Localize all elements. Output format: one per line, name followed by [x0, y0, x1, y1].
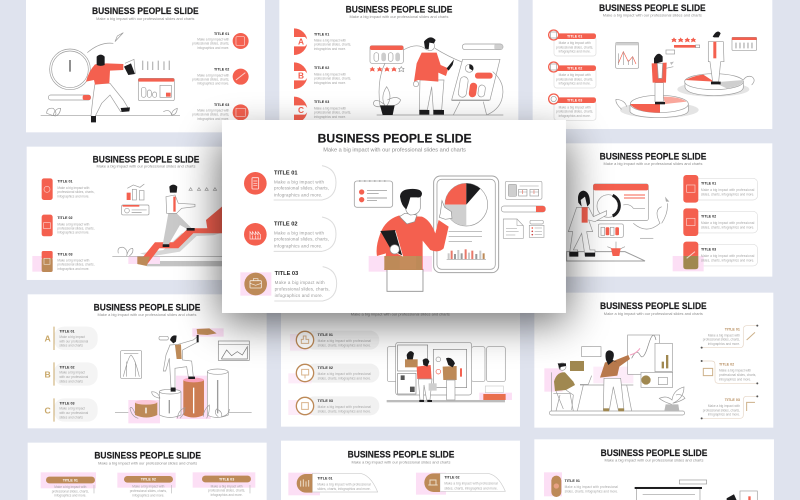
list: three titled items: Make a big impact with: [197, 109, 230, 113]
heading: BUSINESS PEOPLE SLIDE: [601, 448, 707, 458]
sweater: [377, 216, 449, 270]
list: three icon cards: TITLE 03: [701, 248, 716, 252]
list: three titled items with icons: Make a big impact with: [57, 222, 90, 226]
list: three header cards: infographics and more.: [559, 82, 591, 86]
list: A B C pills: with our professional: [59, 339, 89, 343]
list: A B C items: infographics and more.: [314, 115, 346, 119]
list: three icon cards: Make a big impact with professional: [701, 221, 755, 225]
illustration: man with flag on rising cylinders: [115, 328, 252, 423]
list: three connector items: infographics and more.: [719, 377, 751, 381]
list: A B C items: infographics and more.: [314, 81, 346, 85]
list: three titled items: professional slides, charts,: [192, 77, 229, 81]
subheading: Make a big impact with our professional slides and charts: [96, 17, 195, 21]
list: three titled items with icons: infographics and more.: [57, 267, 90, 271]
trousers: [387, 269, 423, 291]
list: three tan header columns: TITLE 01: [63, 478, 78, 482]
chart: small bars: [447, 249, 486, 259]
list: three header cards: TITLE 03: [567, 99, 582, 103]
item: title 01: [244, 166, 336, 200]
progress slider: [501, 206, 546, 212]
list: three connector items: Make a big impact with: [719, 369, 751, 373]
list: three tan header columns: professional slides, charts,: [52, 489, 89, 493]
illustration: woman presenting dashboard: [567, 184, 669, 261]
illustration: man pointing at chart: [369, 189, 452, 291]
list: three ringed pills: TITLE 02: [318, 366, 333, 370]
heading: BUSINESS PEOPLE SLIDE: [318, 132, 472, 146]
list: three titled items: infographics and more.: [197, 82, 229, 86]
list: A B C items: Make a big impact with: [314, 106, 346, 110]
chart: pie: [445, 183, 488, 226]
list: A B C items: [294, 28, 351, 123]
list: three titled items with icons: professional slides, charts,: [57, 190, 95, 194]
list: three connector items: infographics and more.: [708, 413, 740, 417]
list: A B C pills: Make a big impact: [59, 371, 85, 375]
list: three icon cards: slides, charts, infographics and more.: [701, 192, 754, 196]
list: three connector items: TITLE 02: [719, 363, 734, 367]
list: three icon cards: Make a big impact with professional: [701, 188, 755, 192]
list: two tan half circle items: Make a big impact with professional: [444, 482, 498, 486]
icon: checklist: [529, 220, 544, 237]
list: three tan header columns: [41, 472, 255, 498]
list: A B C pills: A: [45, 334, 52, 344]
panel: center slide: [222, 120, 566, 313]
list: three connector items: [701, 325, 758, 419]
panel: slide row three left: [28, 294, 267, 428]
list: three header cards: TITLE 02: [567, 66, 582, 70]
list: three header cards: professional slides, charts,: [556, 110, 593, 114]
folder: [380, 230, 403, 256]
list: three connector items: infographics and more.: [708, 342, 740, 346]
item: title 02: [244, 217, 336, 251]
list: three header cards: [549, 30, 596, 120]
list: three header cards: Make a big impact with: [559, 41, 591, 45]
subheading: Make a big impact with our professional slides and charts: [97, 313, 197, 317]
list: three connector items: TITLE 03: [725, 398, 740, 402]
list: three titled items: professional slides, charts,: [192, 113, 229, 117]
list: three ringed pills: slides, charts, infographics and more.: [318, 343, 371, 347]
item: title 01: Make a big impact with: [274, 179, 324, 184]
list: three header cards: TITLE 01: [567, 34, 582, 38]
subheading: Make a big impact with our professional slides and charts: [603, 14, 702, 18]
list: three titled items: TITLE 02: [214, 68, 229, 72]
icon: document: [503, 219, 523, 238]
heading: BUSINESS PEOPLE SLIDE: [600, 301, 707, 311]
list: three icon cards: TITLE 01: [701, 182, 716, 186]
icon: briefcase: [244, 273, 267, 295]
list: A B C items: professional slides, charts,: [314, 111, 351, 115]
list: three tan header columns: TITLE 03: [219, 477, 234, 481]
list: A B C items: TITLE 02: [314, 66, 329, 70]
list: three icon cards: [673, 175, 758, 271]
list: three titled items with icons: Make a big impact with: [57, 259, 90, 263]
list: three ringed pills: slides, charts, infographics and more.: [318, 376, 371, 380]
panel: slide row four left: [28, 443, 267, 500]
panel: slide row three center: [281, 305, 520, 427]
list: A B C pills: TITLE 03: [59, 401, 75, 405]
subheading: Make a big impact with our professional slides and charts: [604, 312, 703, 316]
list: three tan header columns: infographics and more.: [211, 493, 243, 497]
panel: slide top center: [279, 0, 518, 123]
subheading: Make a big impact with our professional slides and charts: [323, 147, 466, 153]
illustration: two women on pie charts: [616, 31, 757, 118]
list: A B C pills: TITLE 01: [59, 330, 75, 334]
list: two tan half circle items: TITLE 02: [444, 476, 460, 480]
list: three titled items: Make a big impact with: [197, 73, 230, 77]
list: A B C pills: C: [45, 405, 52, 415]
list: three titled items: infographics and more.: [197, 46, 229, 50]
list: three titled items: TITLE 01: [214, 32, 229, 36]
list: A B C items: A: [298, 37, 304, 47]
illustration: calendar card: [354, 181, 393, 207]
list: A B C pills: slides and charts: [59, 344, 83, 348]
list: three titled items: TITLE 03: [214, 103, 229, 107]
list: three ringed pills: slides, charts, infographics and more.: [318, 409, 371, 413]
list: A B C pills: B: [45, 369, 51, 379]
list: A B C items: Make a big impact with: [314, 38, 346, 42]
list: A B C items: TITLE 01: [314, 32, 329, 36]
list: three connector items: professional slides, charts,: [703, 408, 740, 412]
list: A B C pills: Make a big impact: [59, 335, 85, 339]
list: A B C items: Make a big impact with: [314, 72, 346, 76]
list: three ringed pills: Make a big impact with professional: [318, 372, 371, 376]
item: title 03: [240, 267, 337, 301]
item: title 03: Make a big impact with: [275, 280, 325, 285]
list: three header cards: Make a big impact with: [559, 105, 591, 109]
list: three titled items: Make a big impact with: [197, 38, 230, 42]
panel: slide top left: [26, 0, 265, 132]
list: three tan header columns: professional slides, charts,: [130, 489, 167, 493]
card: document summary: [505, 181, 542, 199]
list: three tan header columns: Make a big impact with: [54, 485, 87, 489]
list: A B C items: infographics and more.: [314, 47, 346, 51]
list: three titled items with icons: TITLE 01: [57, 180, 73, 184]
subheading: Make a big impact with our professional slides and charts: [351, 312, 450, 316]
subheading: Make a big impact with our professional slides and charts: [349, 15, 449, 19]
list: three header cards: professional slides, charts,: [556, 77, 593, 81]
list: A B C pills: slides and charts: [59, 379, 83, 383]
list: three ringed pills: Make a big impact with professional: [318, 405, 371, 409]
item: title 03: professional slides, charts,: [275, 286, 330, 291]
subheading: Make a big impact with our professional slides and charts: [98, 461, 197, 465]
list: three tan header columns: infographics and more.: [132, 493, 164, 497]
list: A B C pills: slides and charts: [59, 415, 83, 419]
item: title 01: TITLE 01: [274, 170, 298, 176]
list: A B C items: professional slides, charts,: [314, 43, 351, 47]
list: A B C items: B: [298, 71, 304, 81]
list: three titled items with icons: infographics and more.: [57, 194, 90, 198]
panel: slide row four center: [281, 441, 520, 500]
list: three connector items: Make a big impact with: [708, 404, 740, 408]
illustration: presentation board: [635, 480, 757, 500]
list: three titled items with icons: professional slides, charts,: [57, 263, 95, 267]
list: three header cards: infographics and more.: [559, 114, 591, 118]
list: three titled items: infographics and more.: [197, 117, 229, 121]
panel: slide row three right: [534, 293, 773, 428]
list: three header cards: professional slides, charts,: [556, 45, 593, 49]
item: title 02: TITLE 02: [274, 222, 298, 228]
heading: BUSINESS PEOPLE SLIDE: [599, 3, 706, 13]
heading: BUSINESS PEOPLE SLIDE: [600, 151, 706, 161]
panel: slide mid left: [27, 147, 267, 280]
list: two tan half circle items: Make a big impact with professional: [317, 482, 371, 486]
illustration: two people at video screens: [387, 342, 512, 402]
list: two tan half circle items: slides, charts, infographics and more.: [444, 486, 498, 490]
list: A B C pills: [45, 327, 98, 422]
list: three titled items with icons: TITLE 03: [57, 252, 73, 256]
list: three ringed pills: TITLE 03: [318, 399, 333, 403]
list: A B C pills: with our professional: [59, 411, 89, 415]
illustration: presenter with flip chart: [370, 37, 503, 115]
list: three ringed pills: [288, 331, 379, 415]
list: two tan half circle items: TITLE 01: [317, 476, 333, 480]
center slide shadow: [220, 138, 568, 322]
list item: title 01: Make a big impact with professional: [565, 485, 618, 489]
list: three connector items: professional slides, charts,: [703, 338, 740, 342]
list: A B C pills: with our professional: [59, 375, 89, 379]
panel: slide row four right: [534, 439, 774, 500]
item: title 01: professional slides, charts,: [274, 186, 329, 191]
list: three titled items: [192, 32, 249, 121]
collar and face: [400, 213, 417, 224]
subheading: Make a big impact with our professional slides and charts: [351, 460, 451, 464]
illustration: tablet with pie chart: [434, 176, 499, 273]
list: A B C pills: TITLE 02: [59, 365, 75, 369]
list: three icon cards: slides, charts, infographics and more.: [701, 225, 754, 229]
item: title 03: infographics and more.: [275, 293, 323, 298]
list: A B C items: C: [298, 105, 304, 115]
heading: BUSINESS PEOPLE SLIDE: [94, 451, 201, 461]
hand: [439, 201, 452, 219]
list: three connector items: Make a big impact with: [708, 333, 740, 337]
list: three icon cards: TITLE 02: [701, 215, 716, 219]
list: A B C items: TITLE 03: [314, 100, 329, 104]
heading: BUSINESS PEOPLE SLIDE: [348, 450, 454, 460]
list: three tan header columns: infographics and more.: [54, 494, 87, 498]
list: three titled items with icons: professional slides, charts,: [57, 226, 95, 230]
list item: title 01: slides, charts, infographics and more.: [565, 490, 618, 494]
list: three connector items: professional slides, charts,: [719, 373, 756, 377]
list: three tan header columns: Make a big impact with: [132, 485, 165, 489]
item: title 03: TITLE 03: [275, 271, 298, 277]
illustration: man climbing red arrow: [112, 184, 267, 266]
list: three icon cards: Make a big impact with professional: [701, 254, 755, 258]
list: three titled items with icons: TITLE 02: [57, 216, 73, 220]
list: three tan header columns: Make a big impact with: [211, 484, 243, 488]
illustration: office meeting at desk: [544, 335, 685, 415]
list: three icon cards: slides, charts, infographics and more.: [701, 258, 754, 262]
item: title 02: infographics and more.: [274, 243, 322, 248]
heading: BUSINESS PEOPLE SLIDE: [93, 154, 199, 164]
list item: title 01: [544, 472, 618, 497]
subheading: Make a big impact with our professional slides and charts: [604, 459, 704, 463]
list: A B C pills: Make a big impact: [59, 407, 85, 411]
item: title 02: professional slides, charts,: [274, 237, 329, 242]
panel: slide top right: [533, 0, 772, 129]
list: two tan half circle items: [288, 473, 505, 495]
heading: BUSINESS PEOPLE SLIDE: [346, 5, 452, 15]
list: three tan header columns: TITLE 02: [141, 478, 156, 482]
list: A B C items: professional slides, charts,: [314, 77, 351, 81]
list: three tan header columns: professional slides, charts,: [208, 489, 245, 493]
heading: BUSINESS PEOPLE SLIDE: [92, 6, 199, 16]
list: three ringed pills: Make a big impact with professional: [318, 339, 371, 343]
list: three titled items with icons: Make a big impact with: [57, 186, 90, 190]
list: three ringed pills: TITLE 01: [318, 333, 333, 337]
list: three titled items with icons: [32, 178, 95, 272]
list item: title 01: TITLE 01: [565, 479, 580, 483]
item: title 02: Make a big impact with: [274, 231, 324, 236]
subheading: Make a big impact with our professional slides and charts: [603, 162, 703, 166]
list: three titled items: professional slides, charts,: [192, 42, 229, 46]
list: two tan half circle items: slides, charts, infographics and more.: [317, 487, 371, 491]
list: three titled items with icons: infographics and more.: [57, 231, 90, 235]
heading: BUSINESS PEOPLE SLIDE: [94, 302, 200, 312]
illustration: businessman with clock and megaphone: [41, 33, 180, 122]
subheading: Make a big impact with our professional slides and charts: [96, 165, 196, 169]
icon: factory chart: [244, 223, 267, 246]
panel: slide mid right: [533, 143, 772, 277]
list: three connector items: TITLE 01: [725, 328, 740, 332]
list: three header cards: Make a big impact with: [559, 73, 591, 77]
item: title 01: infographics and more.: [274, 192, 322, 197]
icon: clipboard: [244, 172, 267, 195]
hair: [400, 189, 422, 209]
list: three header cards: infographics and more.: [559, 50, 591, 54]
